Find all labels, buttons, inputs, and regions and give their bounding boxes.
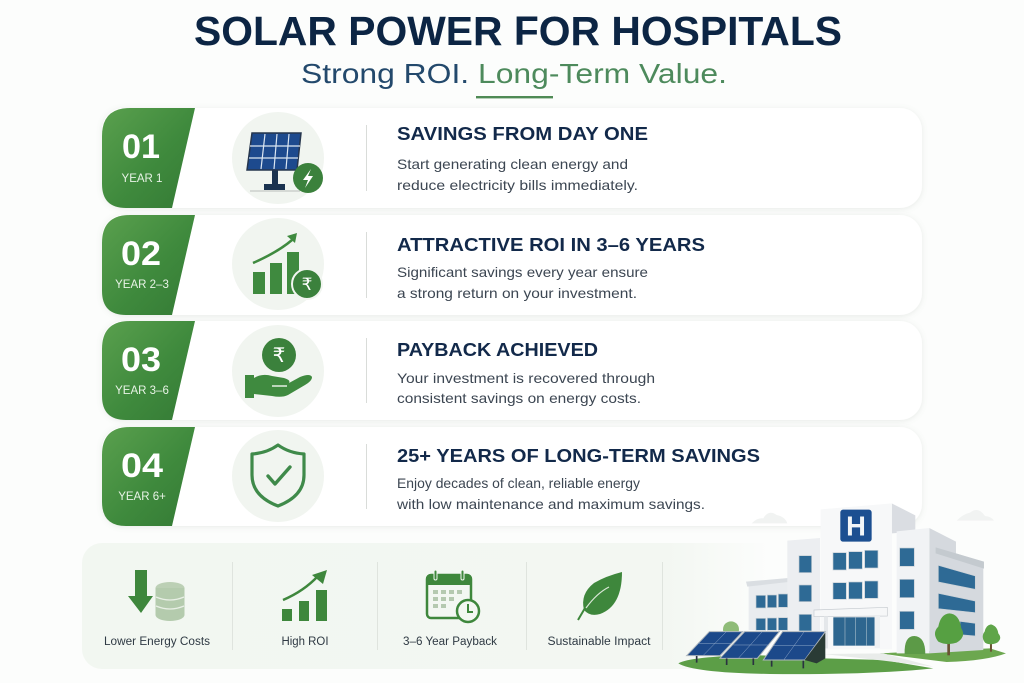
icon: growth chart with rupee: ₹ (302, 275, 312, 295)
divider (366, 232, 367, 298)
bushes and trees (723, 621, 739, 637)
left wing (787, 538, 820, 640)
badge: 04 year 6+ (102, 427, 195, 526)
benefit: payback calendar: 3–6 Year Payback (403, 636, 497, 648)
title: SOLAR POWER FOR HOSPITALS (194, 8, 842, 54)
benefit: sustainable impact leaf: Sustainable Impact (548, 636, 651, 648)
divider (366, 338, 367, 403)
benefit: sustainable impact leaf (548, 572, 651, 648)
badge: 02 year 2-3: 02 (121, 235, 161, 273)
clouds (752, 513, 787, 523)
divider (366, 444, 367, 509)
heading: PAYBACK ACHIEVED (397, 339, 598, 360)
panel: step 01 savings from day one (102, 108, 922, 208)
badge: 01 year 1: YEAR 1 (122, 173, 162, 185)
icon: growth chart with rupee (232, 218, 324, 310)
badge: 03 year 3-6: YEAR 3–6 (115, 385, 169, 397)
centre side face (892, 503, 915, 533)
subtitle: Strong ROI. Long-Term Value. (301, 58, 727, 89)
description: Your investment is recovered through (397, 370, 655, 386)
windows (756, 548, 975, 636)
description: reduce electricity bills immediately. (397, 177, 638, 193)
badge: 03 year 3-6 (102, 321, 195, 420)
badge: 04 year 6+: YEAR 6+ (118, 491, 166, 503)
entrance (814, 607, 887, 617)
description: with low maintenance and maximum savings. (396, 496, 705, 512)
badge: 01 year 1 (102, 108, 195, 208)
H sign: H (846, 511, 866, 542)
description: Enjoy decades of clean, reliable energy (397, 475, 640, 491)
heading: 25+ YEARS OF LONG-TERM SAVINGS (397, 445, 760, 466)
description: Significant savings every year ensure (397, 264, 648, 280)
panel: step 02 attractive roi (102, 215, 922, 315)
divider (366, 125, 367, 191)
badge: 02 year 2-3 (102, 215, 195, 315)
icon: hand holding rupee coin: ₹ (273, 343, 285, 367)
badge: 01 year 1: 01 (122, 128, 160, 166)
benefit: lower energy costs (104, 570, 210, 648)
badge: 02 year 2-3: YEAR 2–3 (115, 279, 169, 291)
description: a strong return on your investment. (397, 285, 637, 301)
description: Start generating clean energy and (397, 156, 628, 172)
right side block (929, 528, 983, 653)
heading: ATTRACTIVE ROI IN 3–6 YEARS (397, 234, 705, 255)
benefit: high roi: High ROI (282, 636, 328, 648)
benefit: high roi (282, 570, 328, 648)
badge: 04 year 6+: 04 (121, 447, 163, 485)
badge: 03 year 3-6: 03 (121, 341, 161, 379)
icon: solar panel with bolt (232, 112, 324, 204)
solar array (687, 632, 825, 660)
panel: benefits strip (82, 543, 942, 669)
benefit: payback calendar (403, 570, 497, 648)
H sign (840, 510, 872, 542)
panel: step 03 payback achieved (102, 321, 922, 420)
icon: shield with check (232, 430, 324, 522)
illustration: hospital with solar panels (678, 503, 1006, 674)
centre tower (821, 503, 892, 649)
right wing front (897, 528, 929, 653)
heading: SAVINGS FROM DAY ONE (397, 123, 648, 144)
far-left wing (747, 580, 788, 630)
icon: hand holding rupee coin (232, 325, 324, 417)
benefit: lower energy costs: Lower Energy Costs (104, 636, 210, 648)
lawn (678, 655, 933, 674)
description: consistent savings on energy costs. (397, 390, 641, 406)
panel: step 04 long-term savings (102, 427, 922, 526)
